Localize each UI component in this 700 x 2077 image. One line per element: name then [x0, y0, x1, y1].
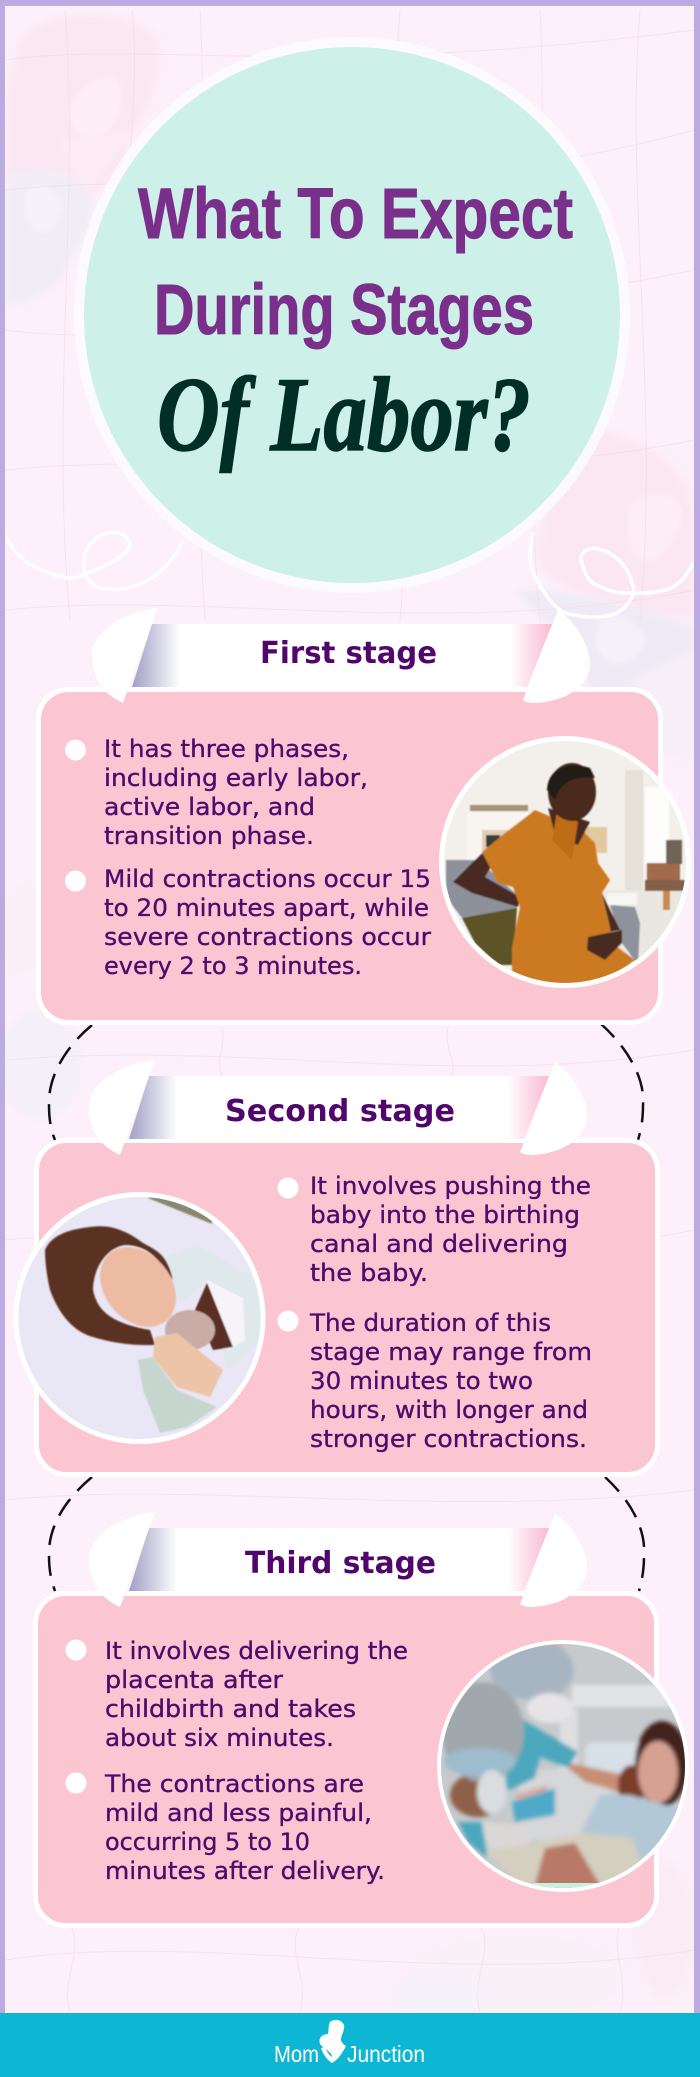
bullet list: occurring 5 to 10: [105, 1828, 310, 1856]
logo wordmark: Mom: [274, 2041, 319, 2067]
bullet list: [278, 1172, 592, 1453]
bullet list: [65, 735, 431, 980]
title: During Stages: [154, 271, 534, 350]
heading ribbon: [92, 608, 590, 703]
photo: medical staff assisting delivery: [437, 1640, 690, 1892]
bullet list: It involves pushing the: [310, 1172, 591, 1200]
card background: [36, 1140, 658, 1474]
panel: second stage: [14, 1060, 658, 1474]
title circle: [74, 37, 630, 593]
decorative flowers: top left: [5, 14, 160, 305]
bullet list: transition phase.: [104, 822, 314, 850]
panel: third stage: [36, 1512, 690, 1926]
logo: MomJunction: [274, 2020, 425, 2067]
title: Of Labor?: [157, 356, 531, 473]
bullet list: stage may range from: [310, 1338, 592, 1366]
logo wordmark: Junction: [347, 2041, 425, 2067]
photo: pregnant woman in labor: [439, 736, 694, 990]
connector: second to third stage right: [605, 1477, 644, 1591]
bullet list: the baby.: [310, 1259, 428, 1287]
bullet list: to 20 minutes apart, while: [104, 894, 429, 922]
bullet list: childbirth and takes: [105, 1695, 356, 1723]
bullet list: including early labor,: [104, 764, 368, 792]
heading: Second stage: [225, 1094, 455, 1129]
bullet list: baby into the birthing: [310, 1201, 580, 1229]
photo: mother with newborn: [14, 1192, 266, 1444]
decorative flowers: bottom right: [390, 1860, 695, 2013]
decorative flowers: right of circle: [515, 430, 694, 760]
card background: [36, 1594, 656, 1926]
bullet list: every 2 to 3 minutes.: [104, 952, 362, 980]
bullet list: active labor, and: [104, 793, 315, 821]
title: [138, 175, 573, 473]
heading ribbon: [89, 1060, 587, 1155]
bullet list: minutes after delivery.: [105, 1857, 385, 1885]
bullet list: severe contractions occur: [104, 923, 431, 951]
bullet list: about six minutes.: [105, 1724, 334, 1752]
bullet list: mild and less painful,: [105, 1799, 372, 1827]
connector: second to third stage left: [49, 1477, 92, 1591]
bullet list: The duration of this: [309, 1309, 551, 1337]
bullet list: stronger contractions.: [310, 1425, 587, 1453]
bullet list: The contractions are: [104, 1770, 364, 1798]
logo icon: [319, 2020, 346, 2063]
connector: first to second stage right: [600, 1023, 643, 1140]
heading ribbon: [89, 1512, 587, 1607]
bullet list: placenta after: [105, 1666, 283, 1694]
panel: first stage: [38, 608, 694, 1022]
heading: Third stage: [245, 1546, 436, 1581]
bullet list: hours, with longer and: [310, 1396, 588, 1424]
bullet list: Mild contractions occur 15: [104, 865, 431, 893]
decorative flowers: lower left: [0, 885, 82, 1120]
bullet list: It involves delivering the: [105, 1637, 408, 1665]
title: What To Expect: [138, 175, 573, 254]
heading: First stage: [260, 636, 437, 671]
bullet list: It has three phases,: [104, 735, 349, 763]
bullet list: canal and delivering: [310, 1230, 568, 1258]
bullet list: [66, 1637, 408, 1885]
card background: [38, 690, 660, 1022]
footer band: [0, 2013, 700, 2077]
connector: first to second stage left: [49, 1025, 92, 1140]
bullet list: 30 minutes to two: [310, 1367, 533, 1395]
decorative curls: [4, 532, 693, 617]
